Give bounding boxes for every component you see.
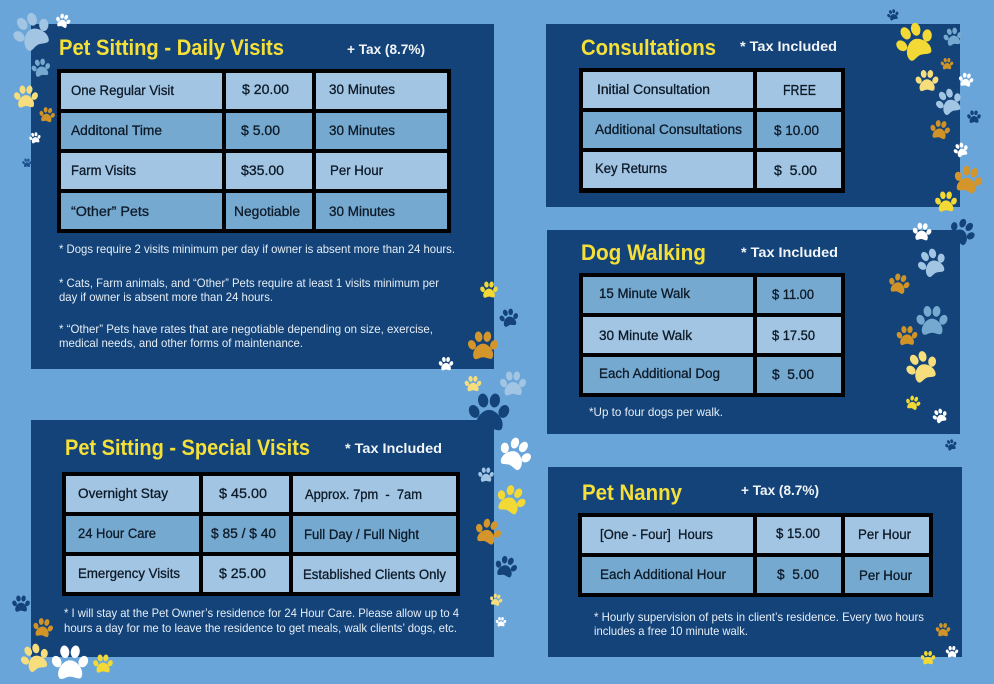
- footnote: special visits: [64, 606, 459, 635]
- table: daily visits: 30 Minutes: [329, 204, 395, 219]
- paw prints: top left cluster: [6, 6, 73, 167]
- table: consultations: Additional Consultations: [595, 122, 742, 137]
- tax note: + Tax (8.7%): [347, 41, 425, 57]
- table: special visits: Established Clients Only: [303, 567, 446, 582]
- table: pet nanny: Each Additional Hour: [600, 567, 726, 582]
- footnote: special visits: * I will stay at the Pet Owner’s residence for 24 Hour Care. Please allow up to 4: [64, 606, 459, 620]
- table: special visits: $ 25.00: [219, 566, 266, 581]
- table: consultations: Initial Consultation: [597, 82, 710, 97]
- table: pet nanny: Per Hour: [859, 568, 912, 583]
- footnotes: daily visits: * Cats, Farm animals, and “Other” Pets require at least 1 visits minimum per: [59, 276, 439, 290]
- table: special visits: $ 85 / $ 40: [211, 526, 276, 541]
- heading: Pet Sitting - Special Visits: Pet Sitting - Special Visits: [65, 435, 310, 460]
- footnotes: daily visits: day if owner is absent more than 24 hours.: [59, 290, 273, 304]
- table: daily visits: Per Hour: [330, 163, 383, 178]
- table: daily visits: Additonal Time: [71, 123, 162, 138]
- footnotes: daily visits: * “Other” Pets have rates that are negotiable depending on size, exercise,: [59, 322, 433, 336]
- panel: Pet Sitting - Daily Visits: [31, 24, 494, 369]
- table: daily visits: 30 Minutes: [329, 123, 395, 138]
- footnote: pet nanny: includes a free 10 minute walk.: [594, 624, 748, 638]
- table: daily visits: “Other” Pets: [71, 204, 149, 219]
- table: special visits: Overnight Stay: [78, 486, 168, 501]
- panel: Consultations: [546, 24, 960, 207]
- table: pet nanny: Per Hour: [858, 527, 911, 542]
- table: dog walking: 15 Minute Walk: [599, 286, 690, 301]
- table: special visits: Approx. 7pm - 7am: [305, 487, 422, 502]
- table: consultations: Key Returns: [595, 161, 667, 176]
- table: daily visits: $ 20.00: [242, 82, 289, 97]
- table: daily visits: Negotiable: [234, 204, 300, 219]
- paw prints: right middle cluster: [886, 214, 981, 451]
- footnote: pet nanny: * Hourly supervision of pets in client’s residence. Every two hours: [594, 610, 924, 624]
- tax note: + Tax (8.7%): [741, 482, 819, 498]
- tax note: * Tax Included: [345, 440, 442, 456]
- heading: Dog Walking: Dog Walking: [581, 240, 706, 265]
- footnotes: daily visits: [59, 242, 455, 350]
- heading: Consultations: Consultations: [581, 35, 716, 60]
- table: daily visits: Farm Visits: [71, 163, 136, 178]
- table: special visits: Full Day / Full Night: [304, 527, 419, 542]
- panel: Pet Nanny: [548, 467, 962, 657]
- table: daily visits: One Regular Visit: [71, 83, 174, 98]
- table: dog walking: 30 Minute Walk: [599, 328, 692, 343]
- table: special visits: [62, 472, 460, 596]
- panel: Dog Walking: [547, 230, 960, 434]
- footnotes: daily visits: * Dogs require 2 visits minimum per day if owner is absent more than 24 hours.: [59, 242, 455, 256]
- table: special visits: Emergency Visits: [78, 566, 180, 581]
- paw prints: bottom right cluster: [920, 623, 959, 664]
- table: dog walking: [579, 273, 845, 397]
- tax note: * Tax Included: [741, 244, 838, 260]
- table: special visits: 24 Hour Care: [78, 526, 156, 541]
- table: dog walking: $ 11.00: [772, 287, 814, 302]
- table: dog walking: $ 17.50: [772, 328, 815, 343]
- table: pet nanny: [578, 513, 933, 597]
- table: pet nanny: [One - Four] Hours: [600, 527, 713, 542]
- panel: Pet Sitting - Special Visits: [31, 420, 494, 657]
- paw prints: centre column: [438, 281, 538, 627]
- footnote: special visits: hours a day for me to leave the residence to get meals, walk clients’ dogs, etc.: [64, 621, 457, 635]
- table: daily visits: $ 5.00: [241, 123, 280, 138]
- footnote: pet nanny: [594, 610, 924, 638]
- paw prints: bottom left cluster: [11, 595, 114, 679]
- table: consultations: FREE: [783, 82, 816, 99]
- table: dog walking: Each Additional Dog: [599, 366, 720, 381]
- table: consultations: $ 5.00: [774, 163, 817, 178]
- table: special visits: $ 45.00: [219, 486, 267, 501]
- table: consultations: $ 10.00: [774, 123, 819, 138]
- table: dog walking: $ 5.00: [772, 367, 814, 382]
- tax note: * Tax Included: [740, 38, 837, 54]
- table: pet nanny: $ 15.00: [776, 526, 820, 541]
- table: pet nanny: $ 5.00: [777, 567, 819, 582]
- table: daily visits: 30 Minutes: [329, 82, 395, 97]
- table: daily visits: [57, 69, 451, 233]
- footnotes: daily visits: medical needs, and other forms of maintenance.: [59, 336, 303, 350]
- table: daily visits: $35.00: [241, 163, 284, 178]
- footnote: dog walking: *Up to four dogs per walk.: [589, 405, 723, 419]
- table: consultations: [579, 68, 845, 193]
- heading: Pet Nanny: Pet Nanny: [582, 480, 683, 505]
- paw prints: top right cluster: [885, 8, 986, 212]
- heading: Pet Sitting - Daily Visits: Pet Sitting - Daily Visits: [59, 35, 284, 60]
